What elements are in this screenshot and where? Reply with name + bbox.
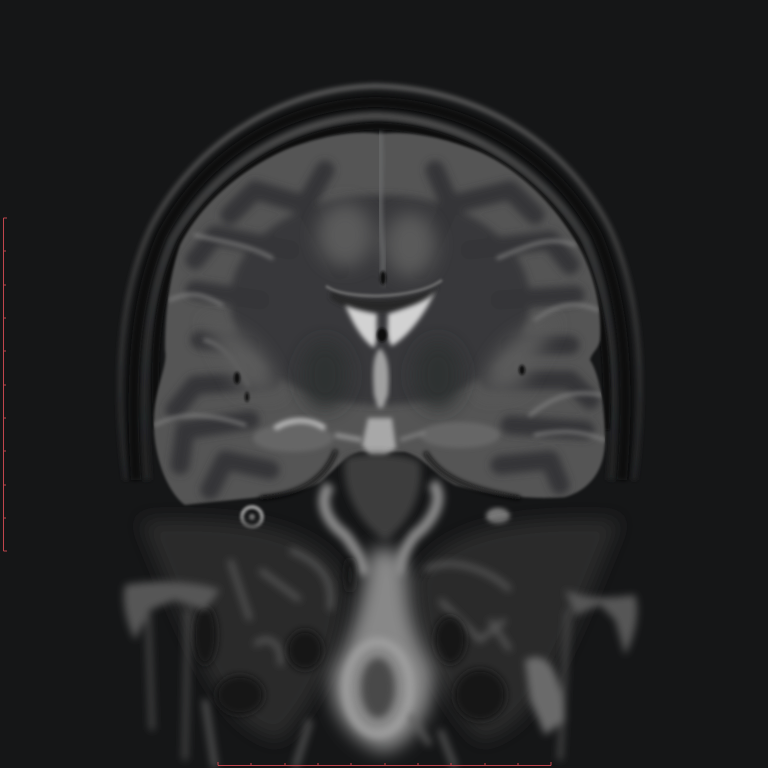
inner ear left — [242, 507, 262, 527]
vascular flow voids — [234, 271, 525, 402]
basal cistern — [362, 418, 396, 456]
inner ear right — [486, 508, 510, 524]
hippocampal regions — [253, 420, 500, 452]
fissure top flow void — [376, 128, 380, 146]
interhemispheric fissure — [380, 132, 385, 285]
white matter — [175, 170, 590, 490]
bright oval rim — [346, 642, 410, 734]
scalp and skull rings — [120, 86, 640, 480]
lower neck bands — [205, 700, 455, 768]
third ventricle — [373, 348, 389, 408]
central midline bright tissue — [331, 548, 434, 752]
callosal roof band — [326, 280, 442, 296]
left ruler — [4, 218, 7, 551]
parotid and jaw right — [525, 590, 637, 760]
brainstem and skull base — [242, 450, 520, 575]
cortex — [154, 133, 605, 505]
insular cortex — [205, 203, 555, 395]
lateral ventricles — [345, 290, 436, 348]
corpus callosum — [330, 286, 438, 312]
bottom ruler — [218, 762, 551, 766]
brain — [154, 128, 605, 505]
pons — [344, 454, 421, 540]
dark muscle spaces — [193, 557, 506, 721]
lateral neck tissue — [140, 519, 620, 740]
midline central oval — [361, 658, 395, 718]
MRI coronal scan figure — [3, 81, 643, 768]
tentorium edge — [260, 450, 520, 498]
bright sulci — [155, 235, 605, 440]
parotid and jaw left — [124, 582, 220, 760]
bright cisterns around pons — [324, 483, 438, 575]
deep grey nuclei — [301, 341, 462, 409]
lower face and neck — [124, 519, 637, 768]
muscle textures — [230, 550, 510, 665]
